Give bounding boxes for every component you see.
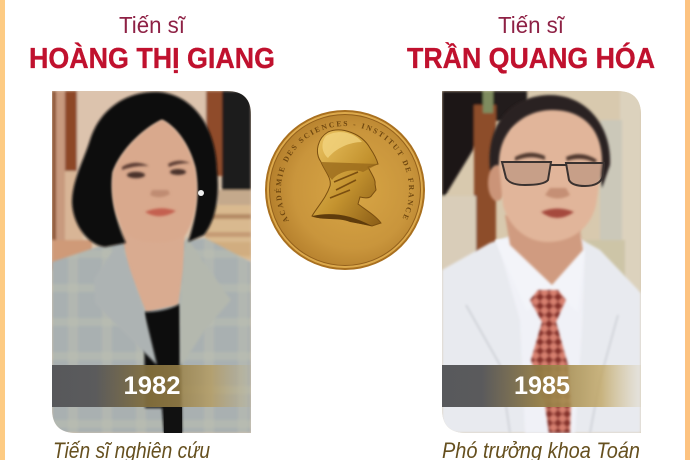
shirt	[524, 430, 576, 433]
necktie	[530, 290, 571, 433]
year: 1982: 1982	[124, 372, 180, 400]
year: 1985: 1985	[514, 372, 570, 400]
ear	[488, 165, 506, 201]
face	[112, 120, 197, 243]
medal head: Minerva profile	[312, 130, 381, 226]
hair	[489, 95, 610, 188]
suit	[442, 236, 641, 433]
lapels	[102, 254, 158, 365]
medal	[265, 110, 425, 270]
hair	[72, 92, 218, 247]
left side border	[0, 0, 5, 460]
portrait: Hoàng Thị Giang	[52, 91, 251, 433]
year band	[52, 365, 251, 407]
right name: TRẦN QUANG HÓA: TRẦN QUANG HÓA	[407, 43, 655, 75]
jacket	[52, 238, 251, 433]
portrait: Trần Quang Hóa	[442, 91, 641, 433]
right side border	[685, 0, 690, 460]
left title: Tiến sĩ: Tiến sĩ	[119, 12, 186, 38]
facial features	[515, 153, 597, 218]
face	[499, 110, 602, 242]
left name: HOÀNG THỊ GIANG: HOÀNG THỊ GIANG	[29, 43, 275, 75]
facial features	[122, 161, 190, 216]
neck	[505, 215, 583, 285]
black top	[144, 304, 182, 433]
right title: Tiến sĩ: Tiến sĩ	[498, 12, 565, 38]
medal inscription: ACADÉMIE DES SCIENCES - INSTITUT DE FRANCE	[274, 121, 414, 222]
glasses	[502, 162, 604, 186]
neck	[120, 220, 185, 312]
year band	[442, 365, 641, 407]
